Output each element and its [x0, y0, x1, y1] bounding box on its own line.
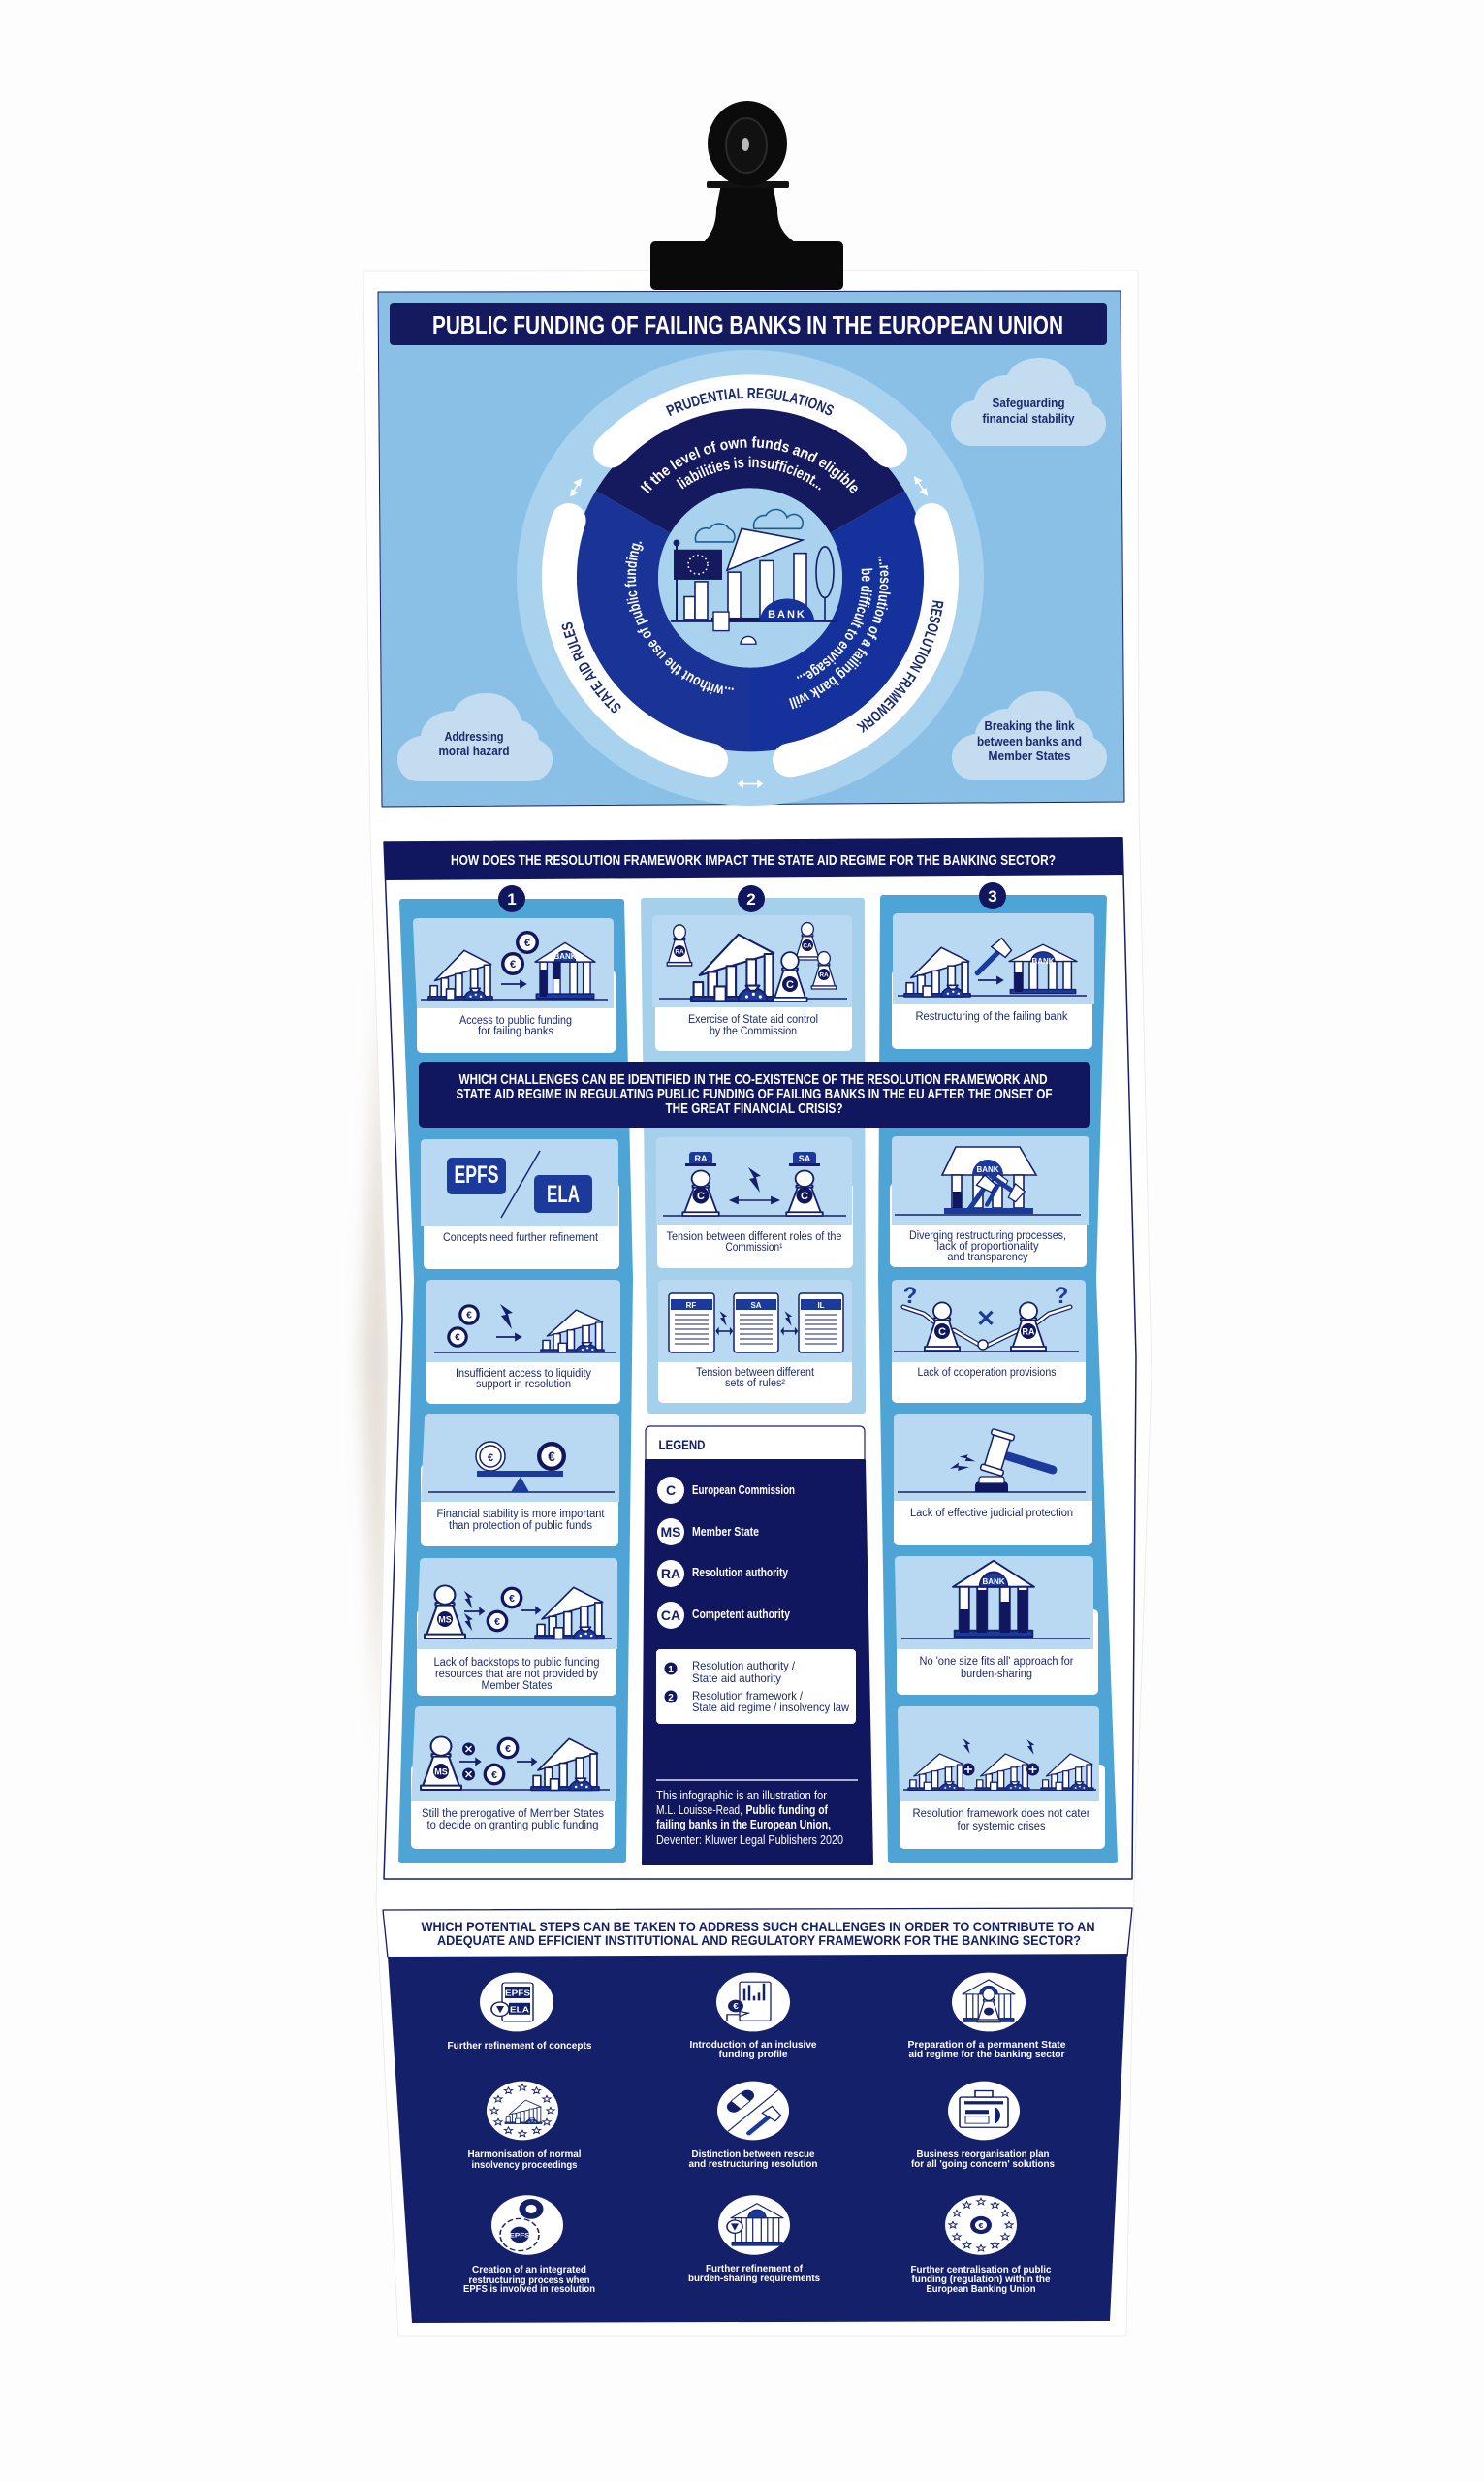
card: lack of backstops: € — [494, 1617, 500, 1628]
card: tension between roles: Commission¹ — [725, 1242, 783, 1254]
card: prerogative of member states: Still the prerogative of Member States — [422, 1808, 604, 1820]
heading: challenges question: THE GREAT FINANCIAL CRISIS? — [665, 1100, 843, 1117]
legend: source credit: failing banks in the European Union, — [656, 1818, 831, 1831]
card: exercise of state aid control: Exercise of State aid control — [688, 1014, 818, 1026]
card: access to public funding: for failing banks — [478, 1026, 553, 1037]
card: no one size fits all: No 'one size fits all' approach for — [919, 1656, 1074, 1668]
legend: source credit — [656, 1789, 843, 1847]
legend: Resolution authority: RA — [661, 1566, 680, 1581]
legend: numbered pairs: Resolution authority / — [692, 1659, 796, 1672]
cloud: breaking the link: Member States — [989, 748, 1070, 763]
card: prerogative of member states: MS — [434, 1766, 448, 1776]
heading: challenges question: STATE AID REGIME IN REGULATING PUBLIC FUNDING OF FAILING BANKS IN THE EU AFTER THE ONSET OF — [456, 1086, 1053, 1102]
card: concepts need further refinement: Concepts need further refinement — [443, 1232, 599, 1244]
card: prerogative of member states: € — [491, 1770, 497, 1781]
arc label: state aid rules: STATE AID RULES — [562, 622, 620, 714]
step: further refinement of concepts: ELA — [510, 2005, 529, 2014]
step: permanent state aid regime: Preparation of a permanent State — [907, 2039, 1066, 2051]
step: inclusive funding profile: € — [733, 2002, 739, 2011]
cloud: breaking the link: Breaking the link — [985, 718, 1075, 733]
step number 3: 3 — [988, 887, 997, 906]
card: concepts need further refinement: EPFS — [454, 1161, 498, 1189]
step number 2: 2 — [746, 890, 756, 908]
step: burden-sharing requirements — [688, 2195, 820, 2284]
legend: Member State: MS — [661, 1524, 680, 1540]
cloud: safeguarding financial stability: financial stability — [983, 411, 1075, 426]
card: no one size fits all: burden-sharing — [961, 1669, 1032, 1680]
heading: resolution framework question: HOW DOES THE RESOLUTION FRAMEWORK IMPACT THE STATE AID REGIME FOR THE BANKING SECTOR? — [451, 852, 1056, 869]
legend: Member State — [657, 1518, 759, 1545]
card: insufficient access to liquidity: support in resolution — [476, 1379, 571, 1390]
card: access to public funding: € — [524, 938, 530, 949]
legend: Resolution authority — [657, 1560, 788, 1587]
card: lack of cooperation provisions: ? — [1055, 1283, 1068, 1309]
step: harmonisation of normal insolvency: Harmonisation of normal — [467, 2148, 582, 2160]
arc label: resolution framework: RESOLUTION FRAMEWORK — [856, 600, 944, 733]
step number 1 — [498, 885, 525, 912]
step: inclusive funding profile — [690, 1973, 817, 2060]
card: insufficient access to liquidity: Insufficient access to liquidity — [456, 1368, 591, 1380]
card: prerogative of member states: € — [505, 1744, 511, 1755]
card: access to public funding: BANK — [553, 952, 577, 961]
card: no systemic crises: Resolution framework does not cater — [913, 1808, 1090, 1820]
heading: challenges question — [419, 1062, 1090, 1128]
card: diverging restructuring processes: lack of proportionality — [936, 1241, 1039, 1253]
legend: source credit: M.L. Louisse-Read, — [656, 1803, 742, 1817]
step: centralisation of public funding — [911, 2195, 1052, 2295]
card: financial stability vs public funds: € — [548, 1449, 555, 1464]
double arrows between arcs — [571, 478, 927, 786]
folded paper sheet — [363, 270, 1152, 2336]
step: integrated restructuring process: EPFS — [510, 2231, 530, 2239]
card: financial stability vs public funds: than protection of public funds — [449, 1520, 592, 1532]
icon: central failing bank with EU flag — [671, 509, 837, 644]
card: lack of cooperation provisions: Lack of cooperation provisions — [917, 1367, 1057, 1379]
card: concepts need further refinement: ELA — [547, 1181, 580, 1208]
legend: Member State: Member State — [692, 1525, 759, 1539]
step: centralisation of public funding: € — [978, 2222, 984, 2230]
step: permanent state aid regime: aid regime for the banking sector — [909, 2049, 1064, 2060]
legend — [643, 1426, 872, 1864]
legend: source credit: Public funding of — [746, 1803, 829, 1817]
legend: numbered pairs: State aid authority — [692, 1671, 781, 1685]
card: lack of cooperation provisions: C — [938, 1326, 946, 1338]
step: integrated restructuring process: Creation of an integrated — [472, 2264, 586, 2275]
legend: numbered pairs: State aid regime / insolvency law — [692, 1701, 849, 1714]
card: lack of backstops: Member States — [481, 1680, 553, 1692]
card: lack of backstops — [417, 1558, 617, 1696]
cloud: breaking the link — [952, 691, 1107, 780]
card: lack of backstops: resources that are not provided by — [435, 1669, 598, 1680]
step: harmonisation of normal insolvency: insolvency proceedings — [471, 2159, 578, 2171]
card: financial stability vs public funds: Financial stability is more important — [436, 1509, 605, 1520]
step: burden-sharing requirements: burden-sharing requirements — [688, 2273, 820, 2284]
step: integrated restructuring process: EPFS is involved in resolution — [463, 2283, 595, 2295]
wheel sentence: be difficult to envisage... — [797, 568, 872, 679]
legend: numbered pairs: Resolution framework / — [692, 1689, 804, 1702]
card: diverging restructuring processes: Diverging restructuring processes, — [909, 1230, 1066, 1242]
card: exercise of state aid control: CA — [803, 942, 812, 950]
card: diverging restructuring processes: BANK — [976, 1165, 999, 1174]
card: access to public funding: € — [510, 959, 516, 971]
wheel sentence — [624, 436, 891, 710]
card: no one size fits all — [895, 1556, 1098, 1695]
card: prerogative of member states — [411, 1706, 616, 1849]
card: financial stability vs public funds: € — [488, 1452, 493, 1464]
card: tension between roles: Tension between different roles of the — [667, 1231, 841, 1243]
step number 2 — [738, 885, 765, 912]
panel: potential steps — [383, 1908, 1132, 2323]
icon: three clipboards: RF — [686, 1301, 696, 1310]
step number 3 — [979, 882, 1006, 909]
card: exercise of state aid control: RA — [675, 948, 684, 956]
legend: numbered pairs — [656, 1649, 856, 1724]
card: insufficient access to liquidity: € — [466, 1311, 472, 1321]
card: no systemic crises: for systemic crises — [958, 1821, 1046, 1832]
card: tension between roles: RA — [694, 1154, 708, 1163]
heading: resolution framework question — [384, 837, 1123, 880]
card: lack of cooperation provisions: ? — [903, 1283, 917, 1309]
card: exercise of state aid control — [652, 915, 852, 1051]
heading: steps question: WHICH POTENTIAL STEPS CAN BE TAKEN TO ADDRESS SUCH CHALLENGES IN ORDER TO CONTRIBUTE TO AN — [421, 1919, 1095, 1934]
step: permanent state aid regime — [907, 1973, 1066, 2060]
step: business reorganisation plan — [911, 2082, 1055, 2170]
circular wheel diagram — [517, 350, 984, 806]
step: integrated restructuring process: restructuring process when — [469, 2275, 589, 2286]
legend: European Commission — [657, 1477, 795, 1504]
card: exercise of state aid control: C — [786, 979, 794, 991]
cloud: breaking the link: between banks and — [977, 734, 1082, 748]
step: integrated restructuring process — [463, 2195, 595, 2295]
cloud: safeguarding financial stability: Safeguarding — [993, 396, 1065, 410]
step number 1: 1 — [507, 890, 517, 908]
step: centralisation of public funding: Further centralisation of public — [911, 2264, 1052, 2275]
step: inclusive funding profile: Introduction of an inclusive — [690, 2039, 817, 2051]
card: insufficient access to liquidity — [426, 1280, 620, 1404]
legend: numbered pairs: 2 — [668, 1693, 674, 1703]
card: restructuring of the failing bank: BANK — [1031, 957, 1055, 966]
heading: challenges question: WHICH CHALLENGES CAN BE IDENTIFIED IN THE CO-EXISTENCE OF THE RESOLUTION FRAMEWORK AND — [459, 1071, 1048, 1088]
step: distinction rescue and restructuring: Distinction between rescue — [692, 2148, 815, 2160]
step: further refinement of concepts — [448, 1973, 592, 2052]
cloud: addressing moral hazard: moral hazard — [438, 744, 510, 758]
legend: source credit: This infographic is an illustration for — [656, 1789, 827, 1802]
wheel sentence: If the level of own funds and eligible — [640, 436, 858, 493]
legend: Competent authority: Competent authority — [692, 1607, 790, 1621]
panel: resolution framework and challenges — [384, 837, 1136, 1879]
icon: three clipboards: IL — [817, 1301, 825, 1310]
arc label: prudential regulations: PRUDENTIAL REGULATIONS — [665, 388, 834, 417]
legend: European Commission: European Commission — [692, 1483, 795, 1497]
card: insufficient access to liquidity: € — [455, 1333, 460, 1344]
binder clip — [650, 101, 843, 290]
card: tension between sets of rules: Tension between different — [696, 1367, 815, 1379]
step: harmonisation of normal insolvency — [467, 2082, 582, 2171]
card: financial stability vs public funds — [421, 1414, 619, 1546]
cloud: safeguarding financial stability — [951, 358, 1106, 446]
card: no one size fits all: BANK — [982, 1577, 1005, 1586]
title bar — [390, 303, 1107, 345]
legend: source credit: Deventer: Kluwer Legal Publishers 2020 — [656, 1833, 843, 1847]
legend: Competent authority: CA — [661, 1607, 680, 1623]
step: inclusive funding profile: funding profile — [719, 2049, 788, 2060]
legend: Competent authority — [657, 1602, 790, 1629]
card: lack of effective judicial protection: Lack of effective judicial protection — [910, 1508, 1073, 1519]
wheel sentence: ...without the use of public funding. — [624, 541, 734, 694]
legend: LEGEND — [659, 1437, 706, 1452]
legend: Resolution authority: Resolution authority — [692, 1566, 788, 1579]
card: diverging restructuring processes — [890, 1136, 1089, 1267]
card: lack of cooperation provisions: RA — [1022, 1326, 1035, 1336]
card: access to public funding — [413, 918, 616, 1053]
card: tension between sets of rules — [658, 1280, 852, 1403]
step: further refinement of concepts: EPFS — [505, 1989, 530, 1997]
card: concepts need further refinement — [421, 1139, 619, 1269]
step: further refinement of concepts: Further refinement of concepts — [448, 2040, 592, 2052]
step: distinction rescue and restructuring: and restructuring resolution — [688, 2158, 818, 2170]
card: exercise of state aid control: by the Commission — [710, 1026, 797, 1037]
card: no systemic crises — [898, 1706, 1105, 1849]
cloud: addressing moral hazard: Addressing — [444, 729, 504, 744]
card: lack of backstops: € — [509, 1594, 515, 1605]
card: tension between roles — [656, 1137, 853, 1268]
step: business reorganisation plan: Business reorganisation plan — [917, 2148, 1049, 2160]
card: restructuring of the failing bank — [892, 913, 1094, 1049]
cloud: addressing moral hazard — [397, 693, 553, 781]
icon: central failing bank with EU flag: BANK — [768, 609, 806, 620]
legend: numbered pairs: 1 — [668, 1665, 674, 1675]
panel: top blue resolution wheel — [378, 291, 1124, 807]
card: prerogative of member states: to decide on granting public funding — [426, 1820, 599, 1831]
card: tension between sets of rules: sets of rules² — [725, 1378, 785, 1389]
card: tension between roles: C — [801, 1191, 808, 1202]
card: diverging restructuring processes: and transparency — [948, 1252, 1028, 1263]
icon: three clipboards: SA — [750, 1301, 762, 1310]
card: lack of cooperation provisions: ✕ — [976, 1306, 995, 1332]
card: tension between roles: SA — [799, 1154, 811, 1163]
card: lack of cooperation provisions — [892, 1280, 1086, 1403]
card: lack of backstops: MS — [438, 1615, 452, 1625]
icon: three clipboards — [669, 1293, 843, 1352]
step: distinction rescue and restructuring — [688, 2082, 818, 2170]
card: lack of backstops: Lack of backstops to public funding — [434, 1657, 599, 1669]
step: centralisation of public funding: funding (regulation) within the — [911, 2274, 1051, 2285]
paper shadow along left fold — [361, 970, 392, 1745]
legend: European Commission: C — [666, 1482, 676, 1498]
title bar: PUBLIC FUNDING OF FAILING BANKS IN THE EUROPEAN UNION — [432, 310, 1063, 339]
step: business reorganisation plan: for all 'going concern' solutions — [911, 2158, 1055, 2170]
wheel sentence: liabilities is insufficient... — [677, 456, 821, 491]
heading: steps question — [421, 1919, 1095, 1948]
step: burden-sharing requirements: Further refinement of — [706, 2263, 803, 2275]
white arcs — [559, 392, 941, 760]
card: exercise of state aid control: RA — [819, 971, 829, 979]
step: centralisation of public funding: European Banking Union — [927, 2283, 1035, 2295]
wheel sentence: ...resolution of a failing bank will — [789, 557, 891, 710]
heading: steps question: ADEQUATE AND EFFICIENT INSTITUTIONAL AND REGULATORY FRAMEWORK FOR THE BANKING SECTOR? — [437, 1932, 1081, 1948]
card: access to public funding: Access to public funding — [459, 1015, 572, 1027]
card: lack of effective judicial protection — [894, 1414, 1092, 1545]
card: tension between roles: C — [697, 1191, 705, 1202]
column backgrounds — [401, 898, 1115, 1861]
card: restructuring of the failing bank: Restructuring of the failing bank — [915, 1011, 1068, 1023]
